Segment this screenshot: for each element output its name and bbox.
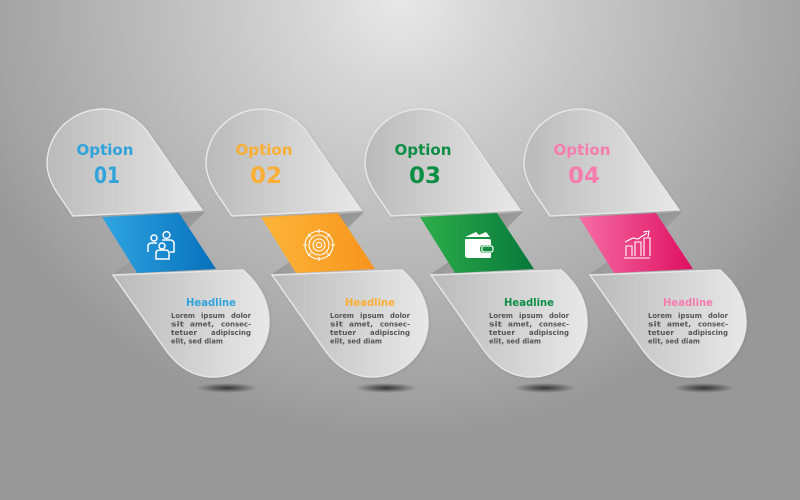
pink ribbon [579,213,693,273]
ground shadow [514,383,576,393]
body text: adipiscing [688,328,728,337]
body text: consec- [221,320,251,328]
option label: Option [76,141,134,159]
fold shadows [431,212,523,274]
body text: Lorem [648,311,672,320]
ground shadow [196,383,258,393]
blue ribbon [102,213,216,273]
step 1: option 01 [47,109,269,393]
body text: tetuer [171,328,197,337]
body text: consec- [698,320,728,328]
body text: amet, [190,320,214,328]
top card [47,109,202,216]
body text: ipsum [519,311,543,320]
body text [489,311,569,346]
option number: 03 [409,164,441,189]
body text: dolor [390,311,410,320]
body text: elit, sed diam [648,336,700,346]
option number: 01 [94,164,120,189]
headline: Headline [186,297,236,309]
body text: adipiscing [370,328,410,337]
headline: Headline [345,297,395,309]
body text: elit, sed diam [330,336,382,346]
option number: 04 [568,164,600,189]
body text: consec- [539,320,569,328]
body text: tetuer [489,328,515,337]
bottom card [431,270,587,377]
top card [365,109,520,216]
green ribbon [420,213,534,273]
fold shadows [113,212,205,274]
body text: tetuer [330,328,356,337]
body text: adipiscing [211,328,251,337]
step 4: option 04 [524,109,746,393]
body text: ipsum [678,311,702,320]
body text: ipsum [360,311,384,320]
body text [330,311,410,346]
body text: Lorem [171,311,195,320]
body text: dolor [708,311,728,320]
option label: Option [394,141,452,159]
body text: dolor [549,311,569,320]
body text [171,311,251,346]
body text: elit, sed diam [171,336,223,346]
body text: amet, [349,320,373,328]
icon: bar chart [624,231,650,258]
icon: target gear [303,229,335,261]
body text: amet, [667,320,691,328]
headline: Headline [504,297,554,309]
ground shadow [355,383,417,393]
body text: sit [489,320,503,328]
bottom card [113,270,269,377]
body text: dolor [231,311,251,320]
top card [206,109,361,216]
icon: wallet [465,232,493,258]
body text: sit [171,320,185,328]
body text: tetuer [648,328,674,337]
step 3: option 03 [365,109,587,393]
body text [648,311,728,346]
fold shadows [272,212,364,274]
body text: Lorem [489,311,513,320]
body text: sit [648,320,662,328]
body text: Lorem [330,311,354,320]
body text: elit, sed diam [489,336,541,346]
step 2: option 02 [206,109,428,393]
orange ribbon [261,213,375,273]
body text: amet, [508,320,532,328]
icon: people [148,232,174,259]
bottom card [590,270,746,377]
ground shadow [673,383,735,393]
option label: Option [554,141,610,159]
body text: adipiscing [529,328,569,337]
body text: ipsum [201,311,225,320]
option label: Option [236,141,292,159]
option number: 02 [250,164,282,189]
body text: sit [330,320,344,328]
body text: consec- [380,320,410,328]
headline: Headline [663,297,713,309]
bottom card [272,270,428,377]
fold shadows [590,212,682,274]
top card [524,109,679,216]
